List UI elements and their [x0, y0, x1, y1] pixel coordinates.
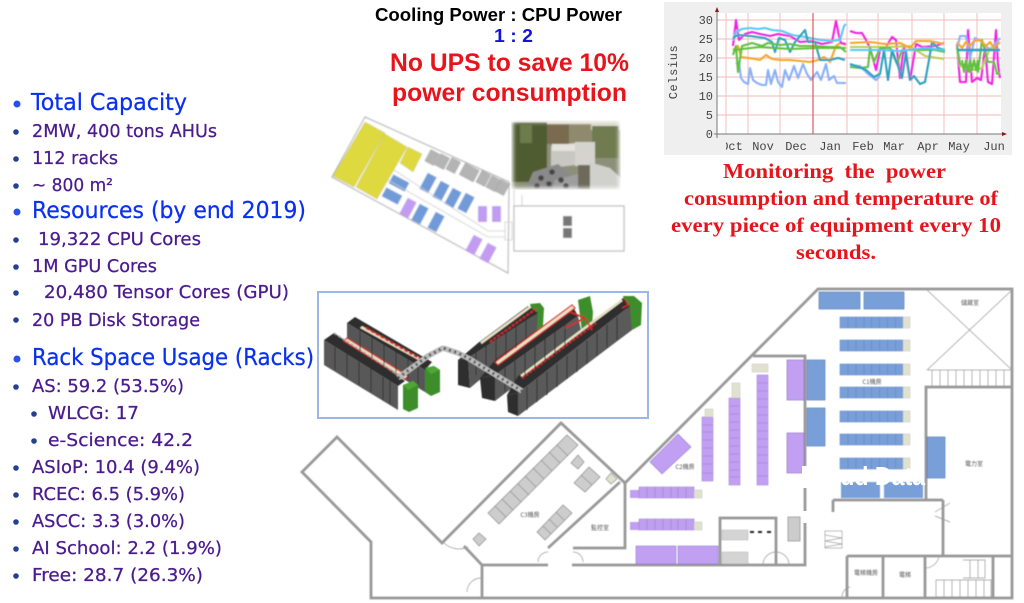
text: monitoring note: consumption and temperature of — [684, 186, 999, 210]
chart: temperature over time: Jun — [983, 140, 1005, 154]
chart: temperature over time: Oct — [721, 140, 743, 154]
text: free space: Free: 28.7 (26.3%) — [32, 565, 203, 586]
chart: temperature over time: 30 — [699, 14, 713, 28]
elevator labels — [854, 568, 911, 579]
server room C1: C1機房 — [862, 377, 882, 386]
text: gpu cores: 1M GPU Cores — [32, 256, 157, 277]
text: WLCG usage: WLCG: 17 — [48, 403, 139, 424]
text: RCEC usage: RCEC: 6.5 (5.9%) — [32, 484, 185, 505]
text: e-Science usage: e-Science: 42.2 — [48, 430, 193, 451]
right rack rows — [458, 296, 642, 416]
text: AS usage: AS: 59.2 (53.5%) — [32, 376, 184, 397]
panel: capacity and usage list — [13, 90, 314, 586]
walkways — [388, 170, 522, 240]
text: ASIoP usage: ASIoP: 10.4 (9.4%) — [32, 457, 200, 478]
photo: rooftop cooling units — [510, 119, 622, 191]
text: ASCC usage: ASCC: 3.3 (3.0%) — [32, 511, 185, 532]
chart: temperature over time: Mar — [883, 140, 905, 154]
gray units — [425, 149, 510, 196]
overlay: partly hidden white caption: Cloud Data — [803, 461, 925, 491]
chart: temperature over time: 25 — [699, 33, 713, 47]
cable tray bridge — [398, 348, 522, 391]
chart: temperature over time: 5 — [706, 109, 713, 123]
heading: cooling to cpu power ratio — [375, 5, 622, 46]
text: tensor cores: 20,480 Tensor Cores (GPU) — [44, 282, 289, 303]
equipment closet — [722, 517, 842, 564]
blue units — [382, 173, 475, 232]
door swings — [311, 445, 950, 597]
server room C2 — [630, 360, 804, 564]
chart: temperature over time: Dec — [785, 140, 807, 154]
axes — [714, 10, 1004, 138]
marker line: current time — [812, 13, 814, 134]
text: racks: 112 racks — [32, 148, 118, 169]
chart: temperature over time: Nov — [752, 140, 774, 154]
text: monitoring note: every piece of equipment every 10 — [671, 213, 1001, 237]
server room C2: C2機房 — [675, 462, 695, 471]
floor plan — [302, 289, 1012, 598]
text: power: 2MW, 400 tons AHUs — [32, 121, 217, 142]
callout: no UPS — [390, 49, 629, 107]
heading: resources: Resources (by end 2019) — [32, 198, 306, 224]
text: disk storage: 20 PB Disk Storage — [32, 310, 200, 331]
overlay: partly hidden white caption — [802, 461, 925, 523]
chart: temperature over time — [664, 2, 1012, 155]
callout: no UPS: power consumption — [392, 79, 627, 107]
chart: temperature over time: Apr — [917, 140, 939, 154]
elevator labels: 電梯 — [899, 570, 911, 579]
floor plan walls — [302, 289, 1012, 598]
diagram: cooling plant site plan — [332, 117, 624, 273]
control room label: 監控室 — [591, 523, 609, 532]
text: cpu cores: 19,322 CPU Cores — [38, 229, 201, 250]
frame: 3D rack layout — [318, 292, 648, 418]
purple units — [399, 198, 501, 263]
chart: temperature over time: Jan — [819, 140, 841, 154]
chart: temperature over time: Celsius — [667, 45, 681, 99]
stairs — [936, 560, 991, 597]
chart: temperature over time: Feb — [852, 140, 874, 154]
power room — [927, 437, 983, 478]
text: floor area: ~ 800 m² — [32, 175, 113, 196]
chart: temperature over time: 0 — [706, 128, 713, 142]
elevator labels: 電梯機房 — [854, 568, 878, 577]
text: monitoring note: seconds. — [796, 240, 876, 264]
server room C3: C3機房 — [520, 510, 540, 519]
heading: total capacity: Total Capacity — [30, 90, 187, 116]
server room C3 — [473, 435, 617, 546]
yellow zones — [333, 122, 422, 199]
storage room: 儲藏室 — [961, 298, 979, 307]
text: monitoring note: Monitoring the power — [723, 159, 946, 183]
heading: rack space usage: Rack Space Usage (Racks) — [32, 345, 314, 371]
text: monitoring note — [671, 159, 1001, 264]
chart: temperature over time: 10 — [699, 90, 713, 104]
callout: no UPS: No UPS to save 10% — [390, 49, 629, 77]
chart: temperature over time: May — [948, 140, 970, 154]
chart: temperature over time: 15 — [699, 71, 713, 85]
text: AI School usage: AI School: 2.2 (1.9%) — [32, 538, 222, 559]
chart: temperature over time: 20 — [699, 52, 713, 66]
heading: cooling to cpu power ratio: 1 : 2 — [494, 26, 533, 46]
left rack rows — [324, 317, 440, 412]
server room C1 — [807, 292, 923, 498]
storage room — [927, 290, 1012, 386]
power room: 電力室 — [965, 459, 983, 468]
heading: cooling to cpu power ratio: Cooling Power : CPU Power — [375, 5, 622, 25]
